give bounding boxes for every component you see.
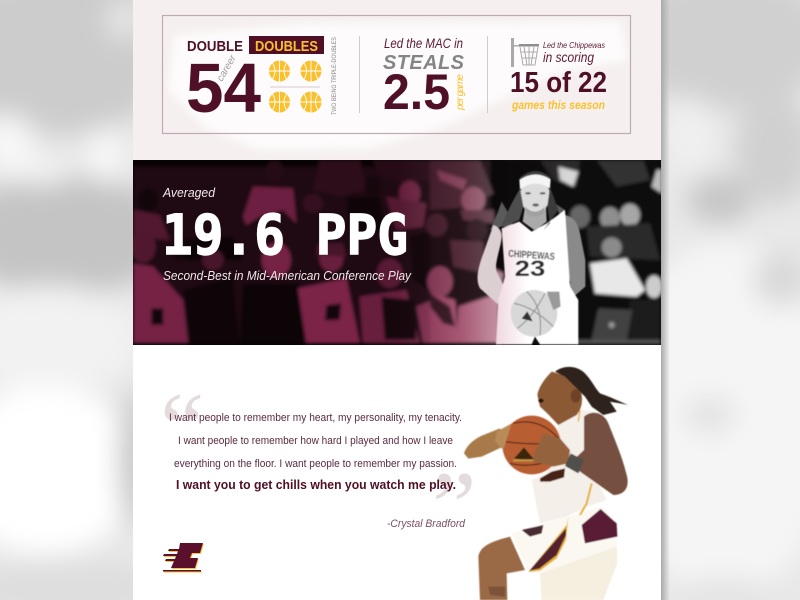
conference subtitle: Second-Best in Mid-American Conference Play bbox=[163, 268, 412, 283]
player driving with the ball bbox=[464, 367, 628, 600]
games this season: games this season bbox=[511, 98, 605, 112]
head bbox=[537, 372, 582, 425]
in scoring label: in scoring bbox=[543, 49, 594, 65]
icon: action C logo bbox=[163, 543, 204, 572]
tattooed arm bbox=[564, 214, 586, 296]
basketball bbox=[511, 290, 557, 337]
stat: steals bbox=[383, 35, 466, 120]
tattooed arm bbox=[572, 413, 628, 495]
number 15 of 22: 15 of 22 bbox=[510, 67, 607, 99]
brush texture bbox=[168, 22, 628, 150]
maroon duotone wash bbox=[133, 160, 505, 345]
basketball bbox=[502, 416, 561, 474]
panel shadow at right edge bbox=[661, 0, 670, 600]
shorts bbox=[512, 507, 617, 600]
wrist band bbox=[565, 453, 584, 473]
dreadlocks bbox=[501, 188, 523, 227]
crowd left half bbox=[130, 160, 433, 343]
jersey number bbox=[540, 468, 565, 482]
jersey bbox=[532, 410, 607, 523]
opening quotation mark: “ bbox=[160, 372, 204, 483]
hands bbox=[533, 433, 570, 467]
icon: four basketballs bbox=[269, 60, 322, 112]
per game label: per game bbox=[455, 74, 466, 111]
heading: double doubles: DOUBLE bbox=[187, 39, 243, 55]
icon: basketball hoop bbox=[511, 38, 539, 67]
career label: career bbox=[215, 53, 239, 84]
attribution: -Crystal Bradford bbox=[387, 518, 466, 530]
heading: double doubles: DOUBLES bbox=[255, 39, 318, 55]
player in jersey 23 bbox=[478, 171, 585, 344]
jersey lettering: CHIPPEWAS bbox=[508, 249, 555, 263]
jersey bbox=[496, 210, 578, 344]
panel: photo band bbox=[130, 160, 663, 345]
number 54: 54 bbox=[186, 49, 261, 127]
heading: double doubles bbox=[187, 36, 324, 55]
headband bbox=[519, 174, 551, 189]
averaged label: Averaged bbox=[162, 185, 216, 200]
steals word: STEALS bbox=[383, 52, 465, 74]
neck and face bbox=[523, 207, 547, 231]
number 2.5: 2.5 bbox=[383, 64, 450, 120]
legs bbox=[478, 537, 525, 600]
player in jersey 23: 23 bbox=[515, 256, 545, 281]
panel: quote bbox=[133, 345, 661, 600]
headline 19.6 PPG: 19.6 PPG bbox=[162, 203, 408, 267]
led the chippewas label: Led the Chippewas bbox=[543, 40, 606, 50]
left arm bbox=[478, 225, 511, 313]
led the MAC label: Led the MAC in bbox=[384, 35, 463, 51]
quote text: I want people to remember my heart, my personality, my tenacity. bbox=[169, 412, 462, 424]
closing quotation mark: ” bbox=[432, 451, 476, 562]
stats frame bbox=[162, 16, 630, 134]
quote text: everything on the floor. I want people to remember my passion. bbox=[174, 458, 457, 470]
hair bbox=[555, 367, 628, 415]
crowd bbox=[130, 160, 663, 344]
forward arm bbox=[464, 428, 507, 459]
quote text bbox=[169, 412, 462, 492]
panel: career stats bbox=[133, 0, 661, 160]
stat: double doubles bbox=[186, 36, 338, 127]
quote text: I want you to get chills when you watch me play. bbox=[176, 477, 456, 492]
crowd right half bbox=[426, 160, 663, 344]
stat: scoring bbox=[510, 38, 607, 112]
quote text: I want people to remember how hard I played and how I leave bbox=[178, 435, 453, 447]
triple-doubles note: TWO BEING TRIPLE-DOUBLES bbox=[331, 37, 338, 115]
